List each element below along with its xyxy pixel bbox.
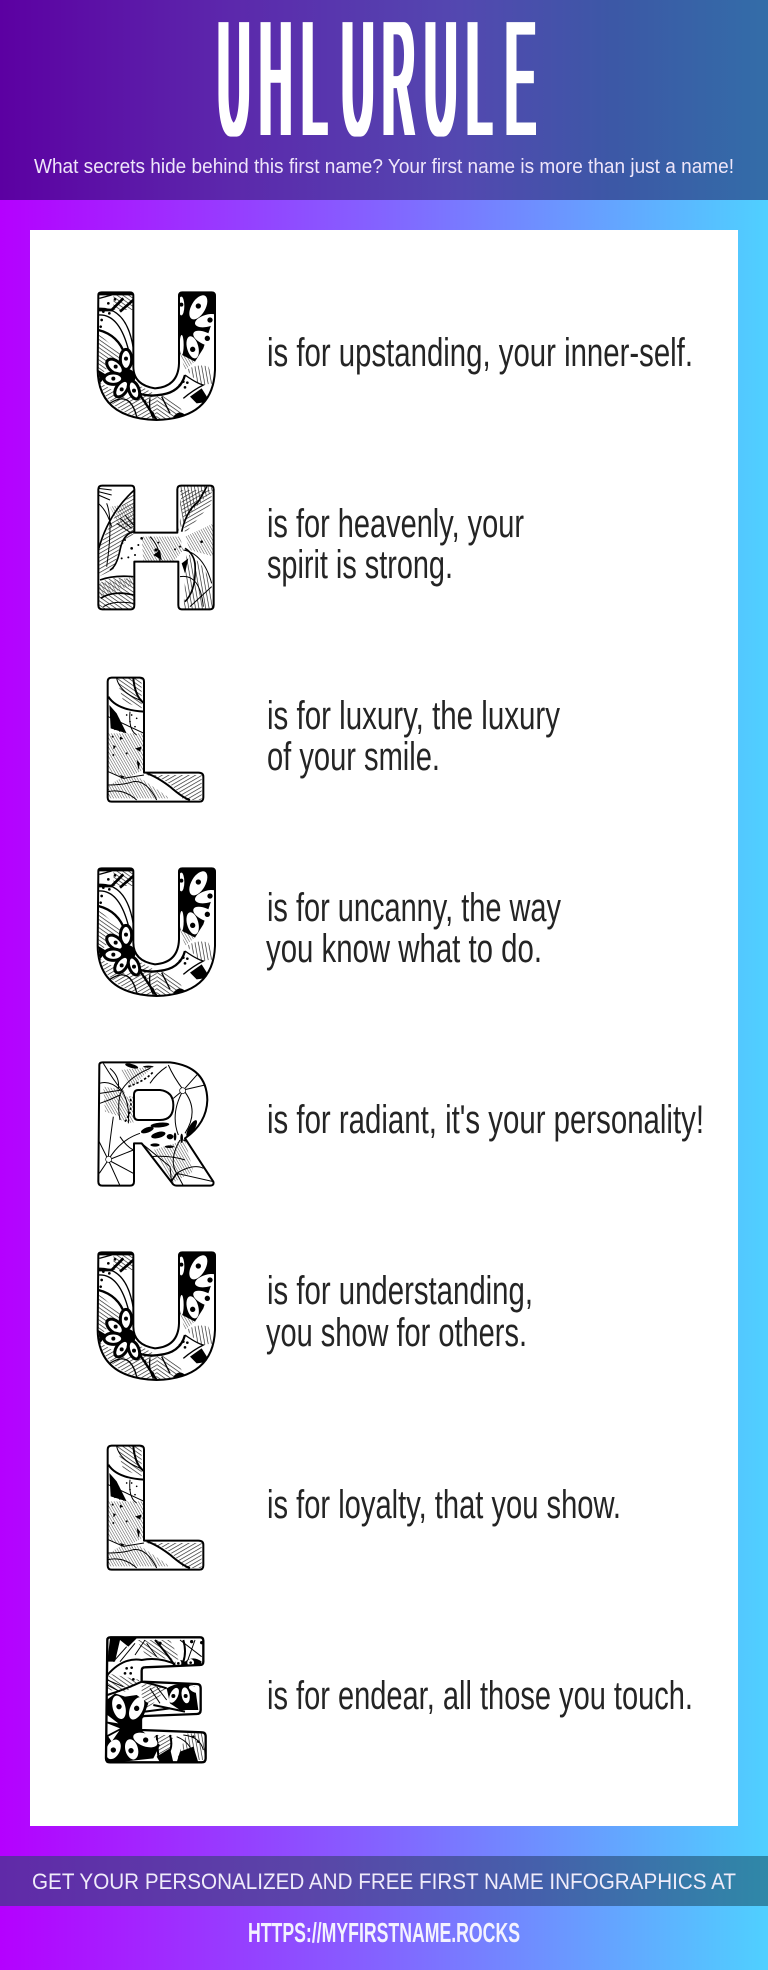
white content panel bbox=[30, 230, 738, 1826]
icon: letter H bbox=[97, 483, 217, 612]
text U bbox=[266, 1269, 533, 1355]
header band bbox=[0, 0, 768, 200]
row E endear bbox=[103, 1637, 693, 1763]
text L bbox=[267, 694, 560, 779]
row L loyalty bbox=[107, 1445, 621, 1571]
footer band bbox=[0, 1856, 768, 1906]
row U uncanny bbox=[97, 866, 561, 998]
row U upstanding bbox=[97, 290, 693, 422]
text U: you know what to do. bbox=[266, 927, 542, 971]
text U: is for uncanny, the way bbox=[267, 886, 561, 930]
footer url: HTTPS://MYFIRSTNAME.ROCKS bbox=[248, 1917, 520, 1948]
text U bbox=[266, 886, 561, 971]
icon: letter L bbox=[107, 677, 205, 803]
icon: letter L bbox=[107, 1445, 205, 1571]
subtitle: What secrets hide behind this first name? Your first name is more than just a name! bbox=[34, 156, 734, 178]
icon: letter R bbox=[97, 1060, 215, 1188]
icon: letter U bbox=[97, 290, 221, 422]
text U: is for understanding, bbox=[267, 1269, 533, 1313]
text H: is for heavenly, your bbox=[267, 502, 524, 546]
footer call to action: GET YOUR PERSONALIZED AND FREE FIRST NAME INFOGRAPHICS AT bbox=[32, 1869, 736, 1894]
text L: is for luxury, the luxury bbox=[267, 694, 560, 738]
text L: is for loyalty, that you show. bbox=[267, 1483, 621, 1527]
row R radiant bbox=[97, 1060, 704, 1188]
icon: letter U bbox=[97, 1250, 221, 1382]
row H heavenly bbox=[97, 483, 524, 612]
text L: of your smile. bbox=[267, 735, 440, 779]
row U understanding bbox=[97, 1250, 533, 1382]
icon: letter E bbox=[103, 1637, 207, 1763]
text H bbox=[267, 502, 524, 587]
text H: spirit is strong. bbox=[267, 543, 453, 587]
text U: you show for others. bbox=[266, 1311, 527, 1355]
row L luxury bbox=[107, 677, 560, 803]
icon: letter U bbox=[97, 866, 221, 998]
